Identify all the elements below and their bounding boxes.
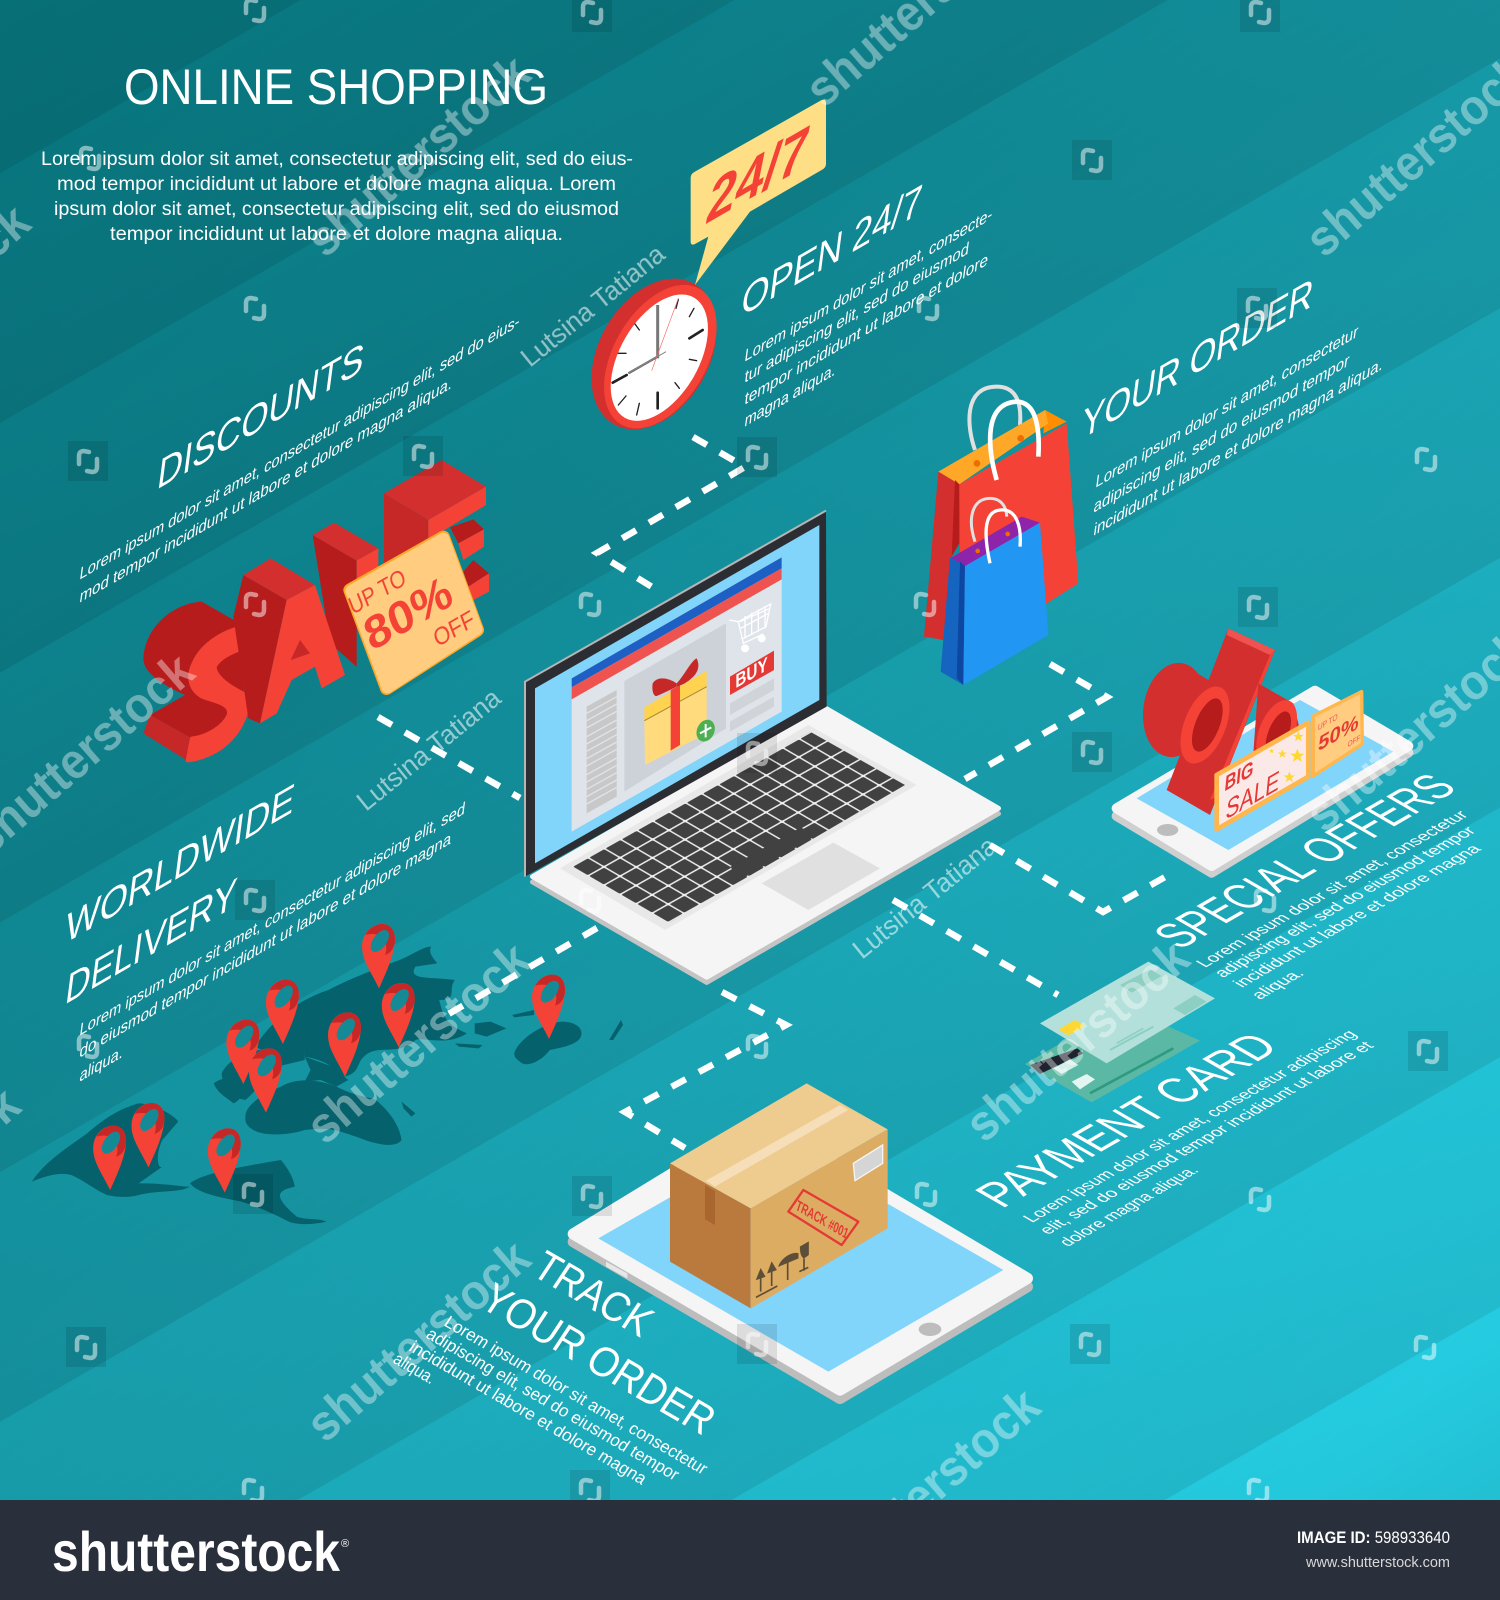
- tablet with parcel: [573, 1083, 1027, 1398]
- payment card text: dolore magna aliqua.: [1054, 1163, 1203, 1249]
- heading: payment card: PAYMENT CARD: [963, 1025, 1290, 1215]
- your order text: adipiscing elit, sed do eiusmod tempor: [1092, 349, 1351, 517]
- sale 3d lettering: [143, 460, 489, 761]
- tracking stamp: [788, 1190, 858, 1245]
- laptop screen: [525, 511, 827, 877]
- heading: discounts: DISCOUNTS: [155, 333, 367, 500]
- continents: [32, 947, 623, 1224]
- shopping bags: [924, 387, 1078, 685]
- discount tag: [345, 537, 478, 688]
- handling icons: [756, 1242, 809, 1297]
- touchpad: [762, 843, 880, 910]
- letter e: [384, 460, 489, 600]
- parcel box: [670, 1083, 888, 1308]
- heading: track your order: YOUR ORDER: [472, 1274, 724, 1444]
- sale ticket: [1217, 692, 1362, 829]
- open 24/7 text: tempor incididunt ut labore et dolore: [743, 249, 989, 409]
- world map: [32, 924, 623, 1224]
- sale ticket: BIG: [1223, 755, 1255, 797]
- dashed connectors: [378, 437, 1165, 1148]
- heading: your order: YOUR ORDER: [1079, 269, 1316, 450]
- letter l: [313, 523, 378, 667]
- clock: [566, 256, 742, 452]
- footer logo: shutterstock: [52, 1520, 341, 1583]
- letter s: [143, 602, 247, 761]
- open 24/7 text: magna aliqua.: [743, 359, 837, 431]
- keyboard: [560, 725, 917, 930]
- worldwide delivery text: do eiusmod tempor incididunt ut labore et dolore magna: [78, 827, 453, 1062]
- open 24/7 text: tur adipiscing elit, sed do eiusmod: [743, 238, 970, 387]
- track your order text: incididunt ut labore et dolore magna: [406, 1337, 651, 1488]
- gift box: [644, 658, 718, 765]
- tablet: [573, 1120, 1027, 1398]
- location pins: [93, 924, 565, 1193]
- speech bubble 24/7: 24/7: [701, 110, 815, 239]
- discounts text: Lorem ipsum dolor sit amet, consectetur adipiscing elit, sed do eius-: [78, 310, 521, 584]
- footer url: www.shutterstock.com: [1305, 1554, 1450, 1571]
- heading: worldwide delivery: DELIVERY: [63, 869, 240, 1015]
- discount tag: UP TO: [345, 564, 410, 621]
- phone: [1117, 691, 1408, 873]
- title: ONLINE SHOPPING: [124, 59, 548, 115]
- footer registered mark: ®: [341, 1538, 349, 1550]
- contributor watermarks: Lutsina Tatiana: [351, 682, 507, 817]
- sale ticket: OFF: [1347, 733, 1361, 749]
- shutterstock watermarks: shutterstock: [954, 929, 1200, 1152]
- heading: worldwide delivery: WORLDWIDE: [63, 774, 298, 954]
- percent symbol: [1137, 628, 1305, 815]
- open 24/7 text: [743, 203, 994, 431]
- clock face: [591, 278, 728, 437]
- discounts text: mod tempor incididunt ut labore et dolore magna aliqua.: [78, 372, 453, 607]
- web page window: [572, 557, 782, 832]
- intro text block: [41, 148, 633, 245]
- track your order text: Lorem ipsum dolor sit amet, consectetur: [441, 1312, 712, 1478]
- laptop: [525, 511, 999, 983]
- buy button: BUY: [735, 654, 768, 693]
- your order text: Lorem ipsum dolor sit amet, consectetur: [1094, 320, 1360, 492]
- back card: [1025, 1007, 1200, 1102]
- red bag: [924, 387, 1078, 640]
- payment card text: elit, sed do eiusmod tempor incididunt ut labore et: [1034, 1038, 1378, 1237]
- intro text block: tempor incididunt ut labore et dolore magna aliqua.: [110, 223, 563, 245]
- credit cards: [1025, 962, 1215, 1102]
- phone with percent sign and sale ticket: [1117, 628, 1408, 873]
- speech bubble 24/7: [691, 100, 826, 285]
- shutterstock watermarks: shutterstock: [805, 1377, 1051, 1600]
- blue bag: [941, 498, 1048, 685]
- your order text: incididunt ut labore et dolore magna aliqua.: [1092, 353, 1384, 540]
- payment card text: Lorem ipsum dolor sit amet, consectetur adipiscing: [1018, 1027, 1361, 1225]
- heading: track your order: TRACK: [524, 1242, 662, 1346]
- shutterstock watermarks: shutterstock: [295, 1229, 541, 1452]
- special offers text: adipiscing elit, sed do eiusmod tempor: [1209, 823, 1480, 980]
- shutterstock watermarks: shutterstock: [295, 44, 541, 267]
- clock ticks: [613, 299, 703, 415]
- sale ticket: 50%: [1317, 709, 1360, 757]
- tracking stamp: TRACK #001: [794, 1197, 850, 1243]
- contributor watermarks: [351, 238, 1003, 965]
- worldwide delivery text: Lorem ipsum dolor sit amet, consectetur adipiscing elit, sed: [78, 798, 466, 1040]
- footer bar: [0, 1500, 1500, 1600]
- discount tag: 80%: [357, 565, 459, 661]
- track your order text: adipiscing elit, sed do eiusmod tempor: [423, 1324, 683, 1484]
- discount tag: OFF: [430, 605, 478, 653]
- shopping cart: [729, 604, 771, 652]
- contributor watermarks: Lutsina Tatiana: [847, 830, 1003, 965]
- laptop base: [532, 708, 999, 983]
- shutterstock watermarks: shutterstock: [295, 931, 541, 1154]
- special offers text: Lorem ipsum dolor sit amet, consectetur: [1191, 807, 1473, 970]
- sale ticket: SALE: [1224, 764, 1281, 826]
- intro text block: Lorem ipsum dolor sit amet, consectetur adipiscing elit, sed do eius-: [41, 148, 633, 170]
- track your order text: aliqua.: [390, 1349, 440, 1388]
- sale ticket: UP TO: [1317, 711, 1338, 733]
- heading: open 24/7: OPEN 24/7: [739, 175, 925, 327]
- open 24/7 text: Lorem ipsum dolor sit amet, consecte-: [743, 203, 994, 366]
- special offers text: incididunt ut labore et dolore magna: [1228, 841, 1486, 990]
- worldwide delivery text: aliqua.: [78, 1041, 124, 1086]
- intro text block: ipsum dolor sit amet, consectetur adipiscing elit, sed do eiusmod: [54, 198, 619, 220]
- front card: [1040, 962, 1215, 1063]
- clock hands: [628, 298, 678, 373]
- contributor watermarks: Lutsina Tatiana: [515, 238, 671, 373]
- special offers text: aliqua.: [1246, 966, 1308, 1002]
- intro text block: mod tempor incididunt ut labore et dolore magna aliqua. Lorem: [57, 173, 616, 195]
- letter a: [233, 558, 345, 723]
- footer image id: IMAGE ID: 598933640: [1297, 1528, 1450, 1547]
